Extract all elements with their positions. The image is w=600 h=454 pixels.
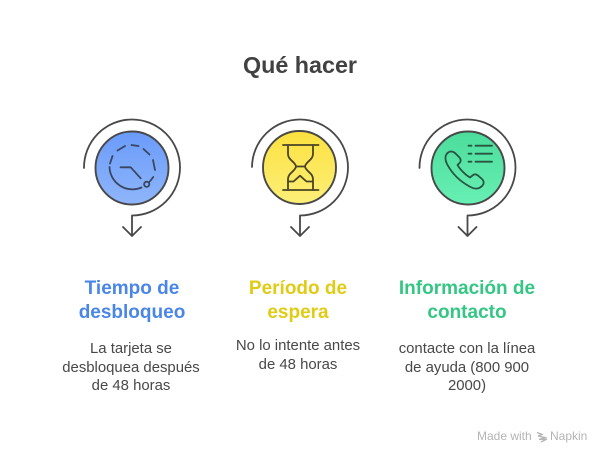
text: Período de espera: No lo intente antes bbox=[236, 338, 360, 354]
heading: Información de contacto bbox=[399, 278, 535, 323]
heading: Información de contacto: Información de bbox=[399, 278, 535, 298]
text: Información de contacto: 2000) bbox=[448, 378, 486, 394]
text: Tiempo de desbloqueo: de 48 horas bbox=[92, 378, 170, 394]
text: Tiempo de desbloqueo: desbloquea después bbox=[62, 360, 200, 376]
text: Información de contacto: contacte con la línea bbox=[399, 341, 535, 357]
icon: napkin logo bbox=[536, 432, 548, 442]
title: Qué hacer bbox=[243, 52, 357, 78]
text: Información de contacto: de ayuda (800 900 bbox=[405, 360, 529, 376]
watermark bbox=[477, 429, 587, 443]
text: Tiempo de desbloqueo: La tarjeta se bbox=[90, 341, 172, 357]
heading: Tiempo de desbloqueo: desbloqueo bbox=[79, 302, 185, 323]
heading: Tiempo de desbloqueo: Tiempo de bbox=[85, 278, 179, 298]
heading: Período de espera: espera bbox=[267, 302, 329, 323]
icon: phone step bbox=[419, 120, 515, 236]
text: Información de contacto bbox=[399, 341, 536, 394]
icon: clock step bbox=[84, 120, 180, 236]
watermark: Made with bbox=[477, 429, 532, 443]
text: Período de espera: de 48 horas bbox=[259, 357, 337, 373]
heading: Tiempo de desbloqueo bbox=[79, 278, 185, 323]
text: Período de espera bbox=[236, 338, 360, 373]
watermark: Napkin bbox=[550, 429, 587, 443]
heading: Información de contacto: contacto bbox=[427, 302, 507, 323]
heading: Período de espera: Período de bbox=[249, 278, 347, 298]
icon: hourglass step bbox=[252, 120, 348, 236]
heading: Período de espera bbox=[249, 278, 347, 323]
text: Tiempo de desbloqueo bbox=[62, 341, 200, 394]
